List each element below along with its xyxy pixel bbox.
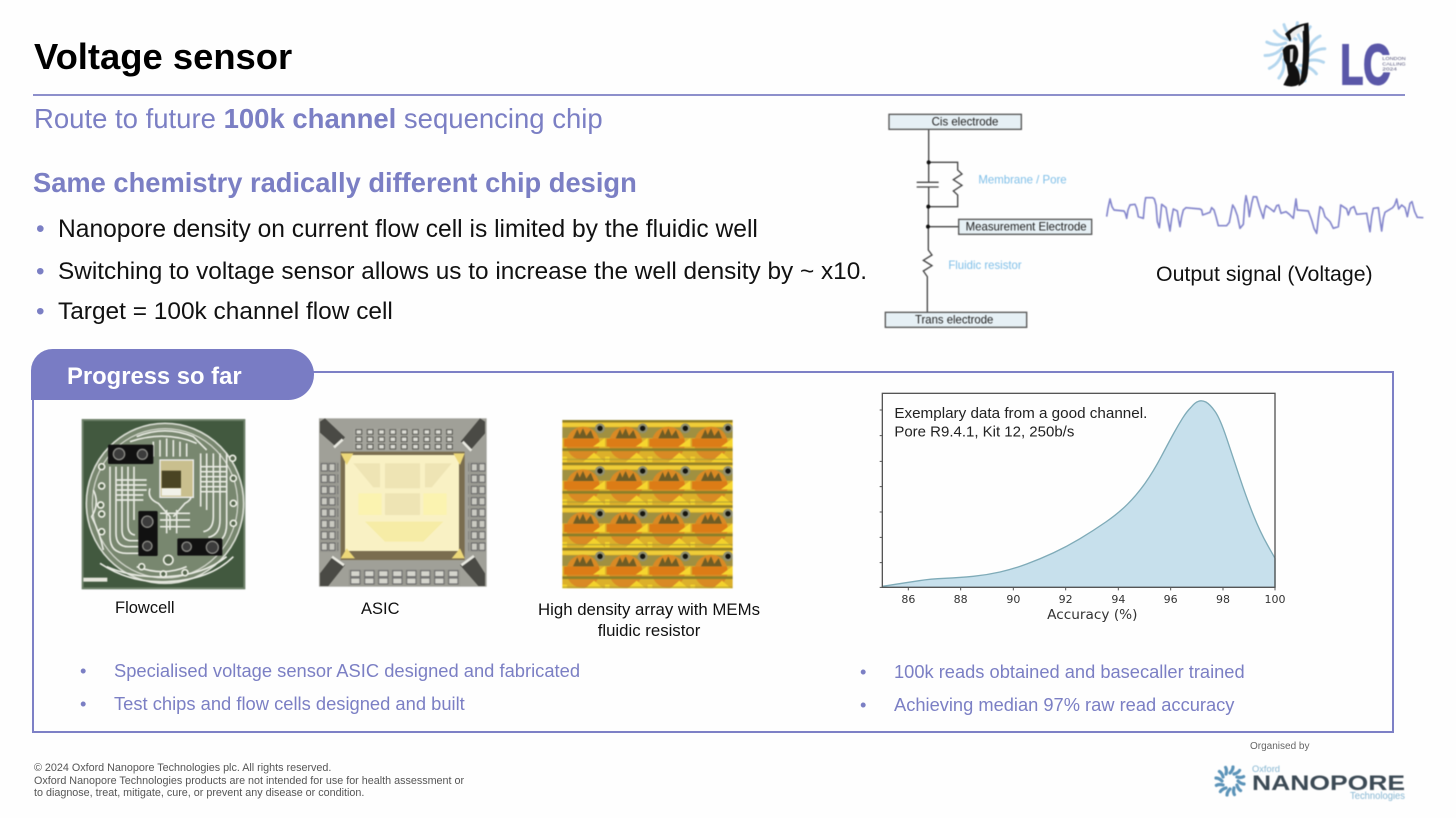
caption: high density array: fluidic resistor bbox=[598, 621, 700, 640]
electrode: trans: Trans electrode bbox=[915, 313, 994, 327]
bullet: Achieving median 97% raw read accuracy bbox=[894, 694, 1234, 715]
x axis labels: 100 bbox=[1264, 593, 1286, 606]
x axis labels: 88 bbox=[954, 593, 968, 606]
event name bbox=[1382, 56, 1406, 73]
electrode: cis: Cis electrode bbox=[932, 115, 999, 129]
heading text: Progress so far bbox=[67, 363, 242, 390]
chart annotation bbox=[894, 405, 1147, 440]
chart annotation: Exemplary data from a good channel. bbox=[894, 405, 1147, 422]
output signal trace bbox=[1105, 194, 1424, 235]
bullet list: progress right: • bbox=[860, 661, 866, 682]
electrode: trans bbox=[885, 312, 1027, 327]
footer copyright: Oxford Nanopore Technologies products are not intended for use for health assessment or bbox=[34, 775, 464, 787]
bullet list: chip design: • bbox=[36, 258, 45, 285]
output signal label: Output signal (Voltage) bbox=[1156, 262, 1373, 286]
event name: LONDON bbox=[1382, 56, 1406, 62]
caption: high density array: High density array with MEMs bbox=[538, 600, 760, 619]
label: fluidic resistor: Fluidic resistor bbox=[948, 258, 1022, 272]
photo: ASIC bbox=[318, 418, 488, 588]
logo: Oxford Nanopore bbox=[1214, 764, 1406, 802]
header divider bbox=[33, 94, 1405, 96]
bullet 1: Nanopore density on current flow cell is limited by the fluidic well bbox=[58, 216, 758, 243]
label: membrane: Membrane / Pore bbox=[978, 173, 1067, 187]
electrode: measurement: Measurement Electrode bbox=[966, 219, 1087, 233]
x axis title: Accuracy (%) bbox=[1047, 607, 1137, 623]
subtitle: Route to future 100k channel sequencing chip bbox=[34, 103, 603, 134]
chart: accuracy distribution bbox=[880, 392, 1286, 623]
x axis labels: 98 bbox=[1216, 593, 1230, 606]
bullet 3: Target = 100k channel flow cell bbox=[58, 298, 393, 325]
x axis labels: 94 bbox=[1111, 593, 1125, 606]
bullet list: chip design: • bbox=[36, 298, 45, 325]
distribution area bbox=[882, 401, 1275, 587]
photo: high density array bbox=[562, 419, 734, 590]
chart annotation: Pore R9.4.1, Kit 12, 250b/s bbox=[894, 423, 1074, 440]
wordmark: LC bbox=[1340, 34, 1390, 97]
event name: CALLING bbox=[1382, 61, 1406, 67]
bullet list: progress right: • bbox=[860, 694, 866, 715]
caption: high density array bbox=[538, 600, 760, 640]
bullet: Specialised voltage sensor ASIC designed and fabricated bbox=[114, 660, 580, 681]
logo: Oxford Nanopore: Technologies bbox=[1350, 791, 1405, 802]
bullet list: progress left: • bbox=[80, 693, 86, 714]
bullet: Test chips and flow cells designed and built bbox=[114, 693, 465, 714]
bullet list: progress left: • bbox=[80, 660, 86, 681]
organiser label: Organised by bbox=[1250, 741, 1309, 752]
bullet list: chip design bbox=[36, 216, 867, 325]
caption: flowcell: Flowcell bbox=[115, 599, 175, 617]
bullet list: chip design: • bbox=[36, 216, 45, 243]
logo: London Calling bbox=[1263, 20, 1406, 97]
circuit diagram bbox=[884, 112, 1094, 329]
bullet list: progress right bbox=[860, 661, 1245, 715]
bullet list: progress left bbox=[80, 660, 580, 714]
footer copyright: © 2024 Oxford Nanopore Technologies plc. All rights reserved. bbox=[34, 762, 331, 774]
x axis labels: 96 bbox=[1164, 593, 1178, 606]
event name: 2024 bbox=[1382, 67, 1397, 73]
x axis labels: 92 bbox=[1059, 593, 1073, 606]
x axis labels: 86 bbox=[901, 593, 915, 606]
x axis labels: 90 bbox=[1006, 593, 1020, 606]
photo: flowcell bbox=[81, 418, 246, 590]
bullet 2: Switching to voltage sensor allows us to increase the well density by ~ x10. bbox=[58, 258, 867, 285]
x axis labels bbox=[901, 593, 1286, 606]
bullet: 100k reads obtained and basecaller trained bbox=[894, 661, 1245, 682]
caption: ASIC: ASIC bbox=[361, 600, 400, 618]
footer copyright: to diagnose, treat, mitigate, cure, or prevent any disease or condition. bbox=[34, 787, 364, 799]
title: Voltage sensor bbox=[34, 36, 292, 77]
heading tab: progress so far bbox=[31, 349, 314, 400]
logo: Oxford Nanopore: Oxford bbox=[1252, 764, 1280, 774]
panel: progress so far bbox=[32, 371, 1394, 733]
footer copyright bbox=[34, 762, 464, 799]
logo: Oxford Nanopore: NANOPORE bbox=[1252, 772, 1405, 795]
section heading: Same chemistry radically different chip design bbox=[33, 167, 637, 198]
electrode: cis bbox=[889, 114, 1021, 129]
